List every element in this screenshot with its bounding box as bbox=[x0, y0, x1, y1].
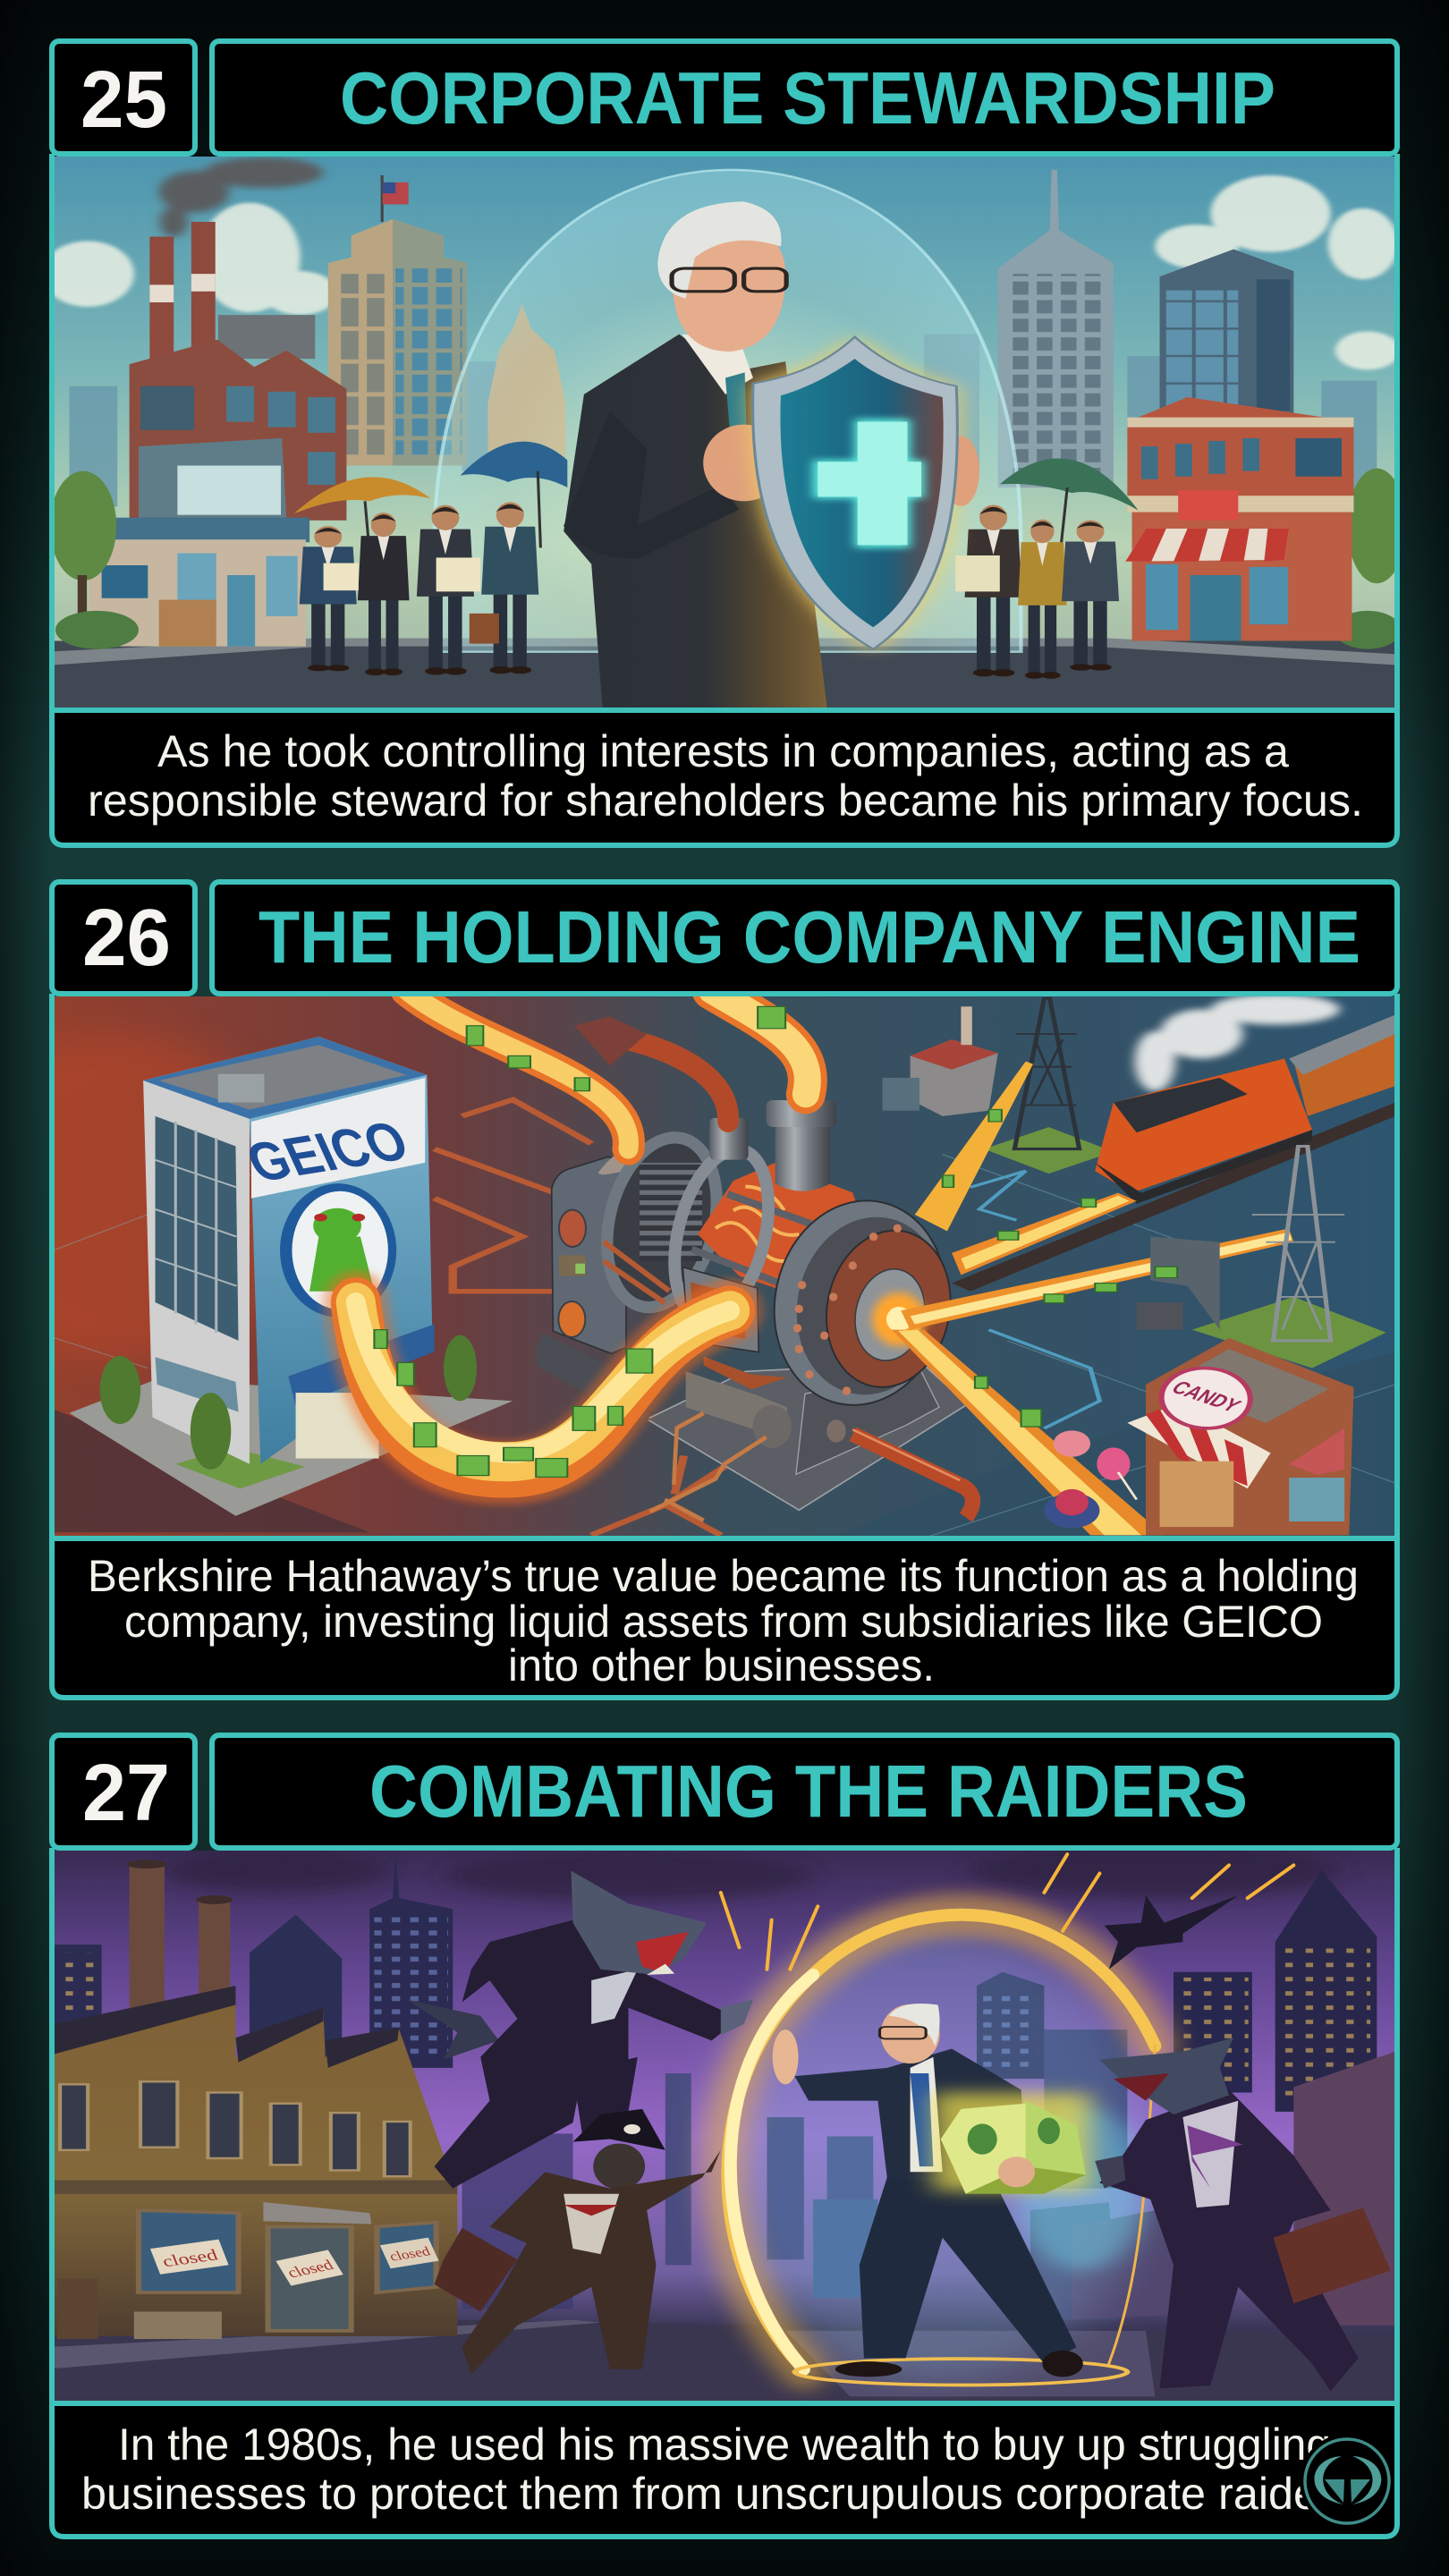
street bbox=[47, 2320, 1395, 2408]
caption box: Berkshire Hathaway’s true value became its function as a holding bbox=[88, 1551, 1359, 1601]
control box bbox=[552, 1157, 626, 1353]
money flows entering at the top bbox=[407, 990, 808, 1149]
icon: small trees bbox=[100, 1335, 477, 1470]
number box 26 bbox=[52, 882, 195, 994]
exhaust stacks bbox=[709, 1118, 749, 1160]
lower cylinder bbox=[686, 1371, 787, 1434]
icon: glowing shield with cross bbox=[753, 337, 979, 649]
right shark raider with briefcase bbox=[1095, 2038, 1391, 2391]
icon: small factory bbox=[883, 1006, 998, 1116]
caption box bbox=[52, 710, 1397, 845]
heading: Combating the Raiders bbox=[212, 1735, 1397, 1848]
closed signs: closed bbox=[284, 2257, 337, 2282]
number box 27: 27 bbox=[82, 1749, 170, 1838]
pirate raider with briefcase bbox=[435, 2109, 721, 2375]
base plate bbox=[647, 1362, 968, 1510]
icon: candy store: CANDY bbox=[1166, 1377, 1247, 1416]
caption box: businesses to protect them from unscrupulous corporate raiders. bbox=[81, 2469, 1368, 2519]
copper pipes on floor bbox=[432, 1097, 728, 1536]
icon: storm clouds bbox=[166, 1843, 1340, 1901]
heading: The Holding Company Engine: THE HOLDING COMPANY ENGINE bbox=[258, 895, 1360, 979]
caption box: responsible steward for shareholders became his primary focus. bbox=[88, 775, 1363, 826]
caption box: into other businesses. bbox=[508, 1640, 935, 1690]
illustration: Buffett shielding businesses from corporate raiders bbox=[47, 1843, 1404, 2408]
center background tower bbox=[487, 304, 565, 477]
money flow from GEICO into engine bbox=[356, 1302, 730, 1472]
track bbox=[952, 1103, 1395, 1292]
caption box bbox=[52, 2403, 1397, 2537]
road bbox=[47, 638, 1404, 712]
red brick storefront bbox=[1125, 397, 1353, 641]
illustration: cash flowing from GEICO through an engine bbox=[0, 990, 1404, 1544]
intake box bbox=[682, 1267, 758, 1352]
icon: candy and lollipops bbox=[1044, 1430, 1137, 1528]
heading: Combating the Raiders: COMBATING THE RAIDERS bbox=[369, 1750, 1248, 1833]
heading: Corporate Stewardship bbox=[212, 41, 1397, 154]
leaping shark raider bbox=[407, 1870, 753, 2189]
right group with umbrella bbox=[955, 459, 1139, 679]
panel: 27 Combating the Raiders bbox=[47, 1735, 1404, 2537]
icon: candy store bbox=[1127, 1338, 1353, 1535]
icon: transmission tower near factory bbox=[984, 998, 1114, 1174]
icon: circular logo watermark bbox=[1300, 2434, 1394, 2529]
icon: golden portal shield bbox=[716, 1854, 1293, 2385]
caption box: In the 1980s, he used his massive wealth to buy up struggling bbox=[118, 2419, 1331, 2470]
front disc bbox=[756, 1184, 964, 1421]
side frame bbox=[52, 994, 1397, 1538]
caption box: company, investing liquid assets from subsidiaries like GEICO bbox=[124, 1597, 1323, 1647]
engine machine bbox=[537, 1100, 973, 1521]
number box 25: 25 bbox=[80, 55, 167, 145]
caption box bbox=[52, 1538, 1397, 1698]
icon: factory smoke bbox=[159, 157, 324, 237]
closed signs bbox=[150, 2238, 438, 2286]
derelict building right bbox=[1293, 2052, 1395, 2326]
glowing core bbox=[872, 1292, 926, 1346]
side frame bbox=[52, 1848, 1397, 2403]
floor grid lines bbox=[47, 1155, 1395, 1538]
icon: GEICO building bbox=[69, 1037, 513, 1516]
Warren Buffett figure bbox=[564, 201, 827, 708]
low glass-front office building bbox=[83, 438, 309, 647]
closed signs: closed bbox=[160, 2247, 220, 2271]
tan office tower with flag bbox=[328, 175, 467, 466]
panel: 26 The Holding Company Engine bbox=[0, 882, 1404, 1698]
panel: 25 Corporate Stewardship bbox=[41, 41, 1406, 845]
icon: glowing stack of cash bbox=[933, 2092, 1090, 2194]
distant skyline bbox=[69, 335, 1377, 506]
glowing coil body bbox=[698, 1163, 865, 1294]
side frame bbox=[52, 154, 1397, 710]
icon: second pylon bbox=[1137, 1147, 1386, 1368]
trees bbox=[50, 469, 1406, 649]
closed signs: closed bbox=[387, 2243, 433, 2264]
number box 26: 26 bbox=[82, 894, 171, 983]
money beams leaving engine bbox=[892, 1062, 1293, 1535]
control wire bbox=[650, 1413, 767, 1521]
caption box: As he took controlling interests in companies, acting as a bbox=[157, 726, 1289, 776]
support leg bbox=[796, 1371, 939, 1474]
Warren Buffett blocking with money bbox=[773, 2004, 1083, 2377]
heading: The Holding Company Engine bbox=[212, 882, 1397, 994]
night city skyline bbox=[54, 1852, 1377, 2320]
rear finned section bbox=[590, 1126, 733, 1319]
blue cable lines bbox=[970, 1171, 1099, 1428]
icon: flying bird silhouette bbox=[1105, 1895, 1238, 1970]
icon: GEICO building: GEICO bbox=[237, 1110, 418, 1193]
icon: dollar bills in the flow bbox=[374, 1006, 1177, 1477]
left group with umbrellas bbox=[294, 442, 567, 675]
number box 27 bbox=[52, 1735, 195, 1848]
grey glass towers on the right bbox=[998, 170, 1293, 487]
icon: train and smoke bbox=[1095, 994, 1395, 1204]
heading: Corporate Stewardship: CORPORATE STEWARDSHIP bbox=[340, 56, 1275, 140]
number box 25 bbox=[52, 41, 195, 154]
icon: clouds bbox=[41, 175, 1400, 369]
protective glass dome bbox=[435, 170, 1021, 652]
red brick factory and chimneys bbox=[130, 222, 346, 521]
illustration: Buffett holding a shield in front of businesses bbox=[41, 153, 1406, 712]
copper outlet pipe bbox=[852, 1434, 973, 1518]
icon: abandoned factory bbox=[54, 1860, 457, 2339]
